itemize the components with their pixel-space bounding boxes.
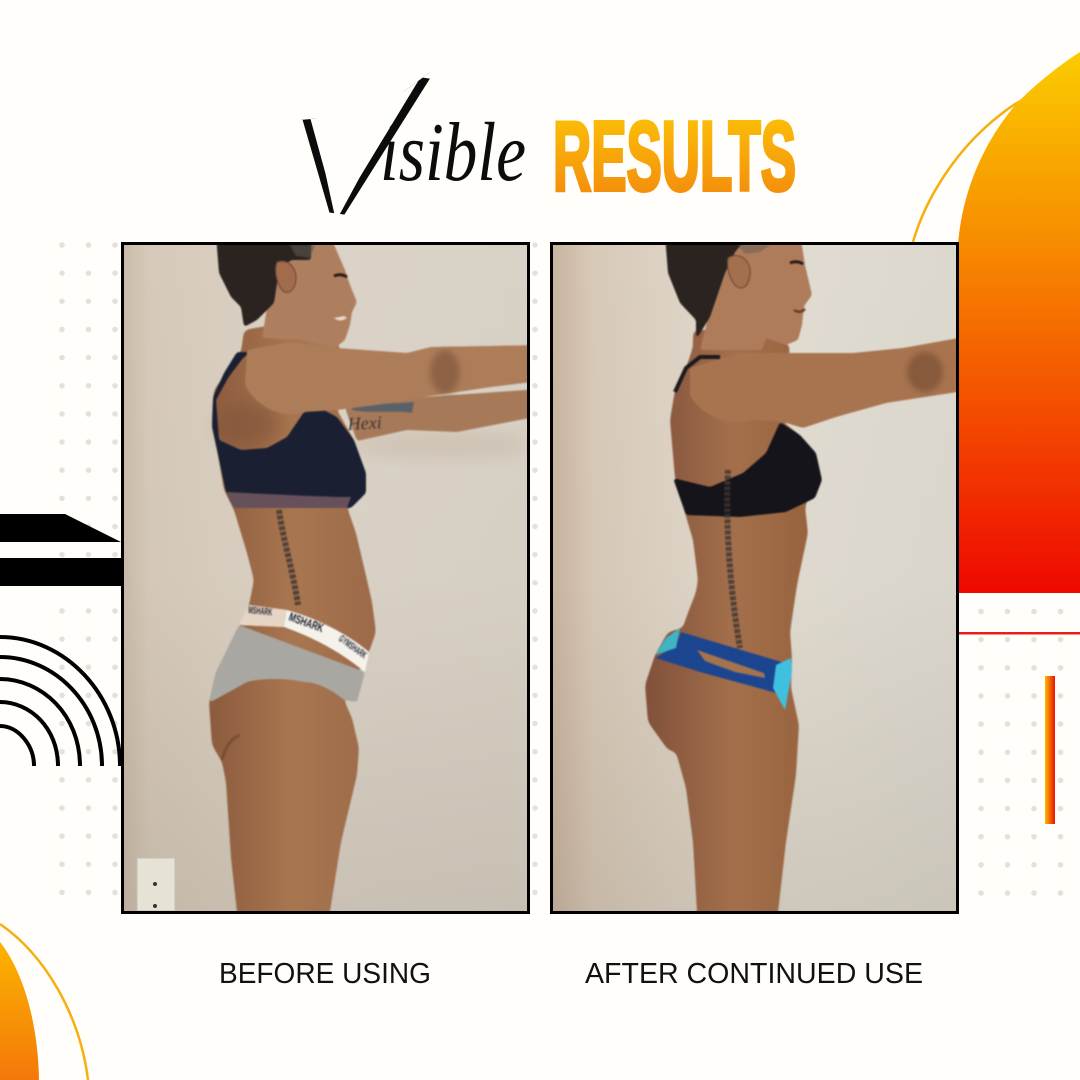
- hair: [664, 245, 742, 337]
- bikini gap: [697, 650, 765, 678]
- glute crease: [222, 735, 240, 760]
- eye and smile: [790, 262, 803, 264]
- elbow shadow: [430, 350, 460, 394]
- spine tattoo: [279, 510, 298, 605]
- body: [209, 320, 376, 930]
- arm tattoo: [346, 402, 414, 434]
- dot pattern: between photos: [532, 242, 539, 902]
- bikini cyan left: [655, 628, 680, 655]
- hair grey highlight: [738, 245, 770, 254]
- caption: before using: BEFORE USING: [219, 958, 431, 990]
- body: [645, 330, 815, 930]
- decoration: black stripes left: [0, 514, 122, 586]
- photo frame: after: [552, 244, 958, 912]
- figure: [645, 235, 970, 930]
- lower arm: [345, 389, 540, 441]
- waistband: [239, 605, 369, 672]
- bra band: [226, 492, 351, 508]
- caption: after continued use: AFTER CONTINUED USE: [585, 958, 923, 990]
- ear: [727, 255, 750, 288]
- spine tattoo: [727, 470, 740, 648]
- decoration: bottom left orange arc shape: [0, 924, 88, 1080]
- decoration: vertical gradient bar: [1045, 676, 1055, 824]
- dot pattern: left: [59, 242, 119, 902]
- decoration: top right orange arc shape: [913, 52, 1080, 593]
- title word: RESULTS: RESULTS: [553, 101, 796, 211]
- elbow shadow: [907, 352, 943, 392]
- sports bra: [673, 422, 822, 517]
- outlet: [137, 858, 175, 911]
- underwear: [209, 625, 365, 703]
- photo: after continued use: [553, 235, 970, 930]
- bikini straps: [656, 632, 785, 695]
- bra strap: [675, 357, 720, 392]
- title: [300, 72, 796, 215]
- hair grey highlight: [290, 245, 315, 258]
- figure: GYMSHARK: [336, 634, 369, 661]
- sports bra back strap and cup: [212, 352, 366, 508]
- upper arm: [245, 342, 540, 414]
- title word: Visible: V: [245, 0, 450, 281]
- hair: [216, 235, 311, 327]
- waistband text: MSHARK: [248, 605, 273, 619]
- dot pattern: right: [978, 608, 1064, 900]
- arm tattoo: Hexi: [346, 412, 382, 434]
- decoration: concentric arcs left: [0, 637, 120, 766]
- upper arm: [690, 336, 970, 428]
- upper back shade: [227, 404, 280, 446]
- head: [262, 240, 357, 348]
- wall shadow: [360, 432, 520, 458]
- figure: [209, 235, 540, 930]
- head: [700, 240, 812, 350]
- ear: [276, 261, 296, 292]
- decoration: red line: [958, 632, 1080, 634]
- photo: before using: [124, 235, 540, 930]
- figure: MSHARK: [287, 610, 326, 635]
- title word: Visible: isible: [380, 106, 526, 199]
- bikini cyan right: [773, 658, 792, 710]
- photo frame: before: [122, 244, 528, 912]
- title word: Visible: [300, 72, 524, 215]
- eye and smile: [334, 275, 347, 277]
